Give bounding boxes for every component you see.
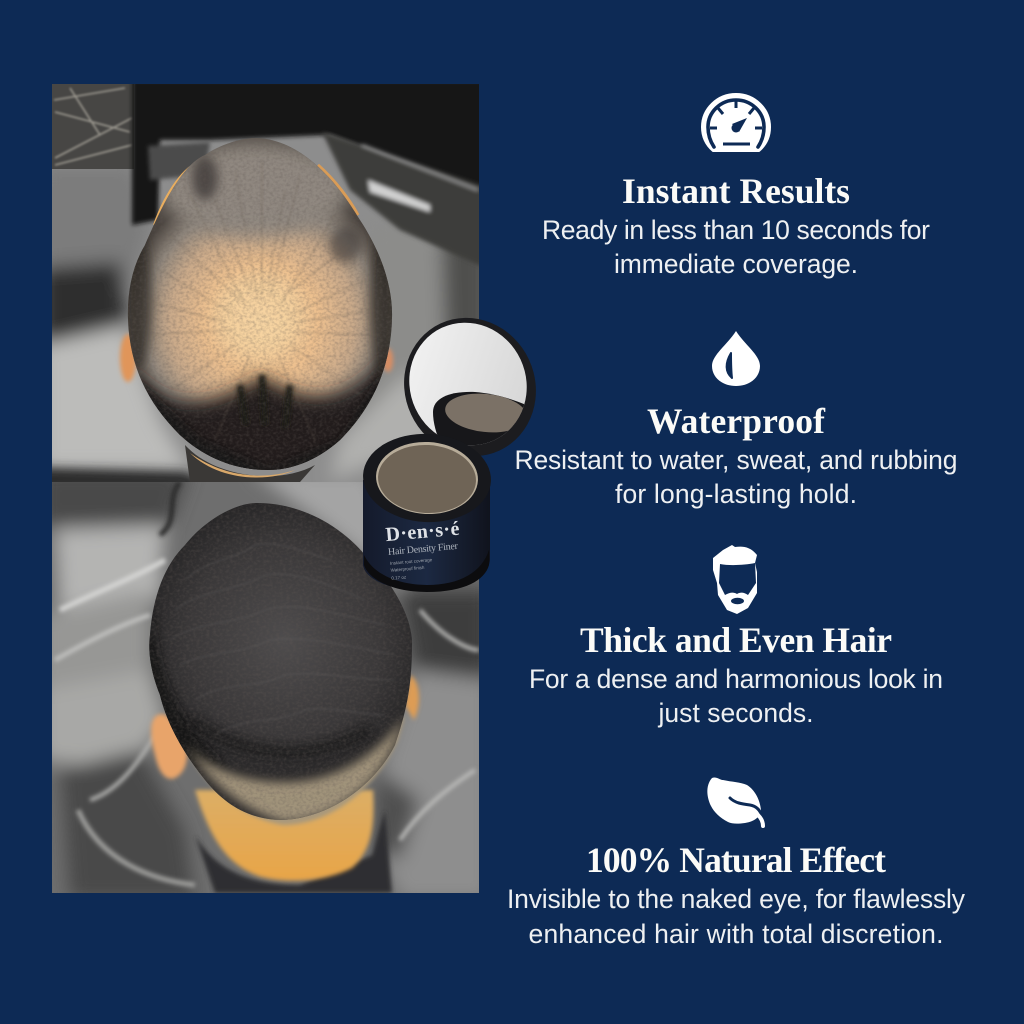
text: Waterproof description: Resistant to water, sweat, and rubbing [514,445,958,475]
chair arm [148,142,210,180]
text: Instant Results description: Ready in less than 10 seconds for [542,215,930,245]
ears [120,334,393,382]
bottom dark strip [52,460,190,482]
collar [195,810,392,893]
heading: Instant Results: Instant Results [622,171,850,211]
text: Thick and Even Hair description [529,664,943,728]
product label: 0.17 oz [391,574,407,581]
text: 100% Natural Effect description: Invisible to the naked eye, for flawlessly [507,884,966,914]
icon: speedometer [702,94,770,151]
text: Thick and Even Hair description: just seconds. [658,698,814,728]
icon: water drop [712,331,760,386]
product label: D·en·s·é [385,518,460,546]
text: Waterproof description: for long-lasting hold. [615,479,857,509]
cape folds, blurred [40,470,490,900]
scalp and thinning hair [128,138,392,470]
icon: leaf [707,777,763,826]
heading: Thick and Even Hair: Thick and Even Hair [580,620,892,660]
photo: before, balding scalp from above [40,80,490,490]
text: 100% Natural Effect description [507,884,966,949]
product label [385,518,463,581]
text: Thick and Even Hair description: For a dense and harmonious look in [529,664,943,694]
compact base [361,431,493,592]
dense hair [140,495,420,825]
photo: after, dense hair from behind [40,470,490,900]
studio background, blurred [40,165,490,480]
forehead skin edge [153,166,190,225]
neck [195,790,374,881]
wavy hair texture [218,714,382,734]
product label: Waterproof finish [390,565,425,573]
icon: bearded face [713,545,757,614]
neck sliver [185,445,315,482]
text: 100% Natural Effect description: enhanced hair with total discretion. [528,919,944,949]
text: Instant Results description: immediate coverage. [614,249,858,279]
heading: Waterproof: Waterproof [647,401,826,441]
text: Instant Results description [542,215,930,279]
hair strands radiating from crown [158,232,364,439]
nape fade [175,715,405,825]
ears [151,675,419,779]
product label: Hair Density Finer [388,541,459,558]
product label: Instant root coverage [390,557,433,566]
fold highlights [55,482,479,885]
marble corner, top left [52,84,134,169]
compact lid with mirror [404,318,536,456]
marble ledge, right [322,134,479,266]
heading: 100% Natural Effect: 100% Natural Effect [586,840,886,880]
text: Waterproof description [514,445,958,509]
product: open compact with mirror [363,318,536,592]
black cabinet [132,80,490,225]
